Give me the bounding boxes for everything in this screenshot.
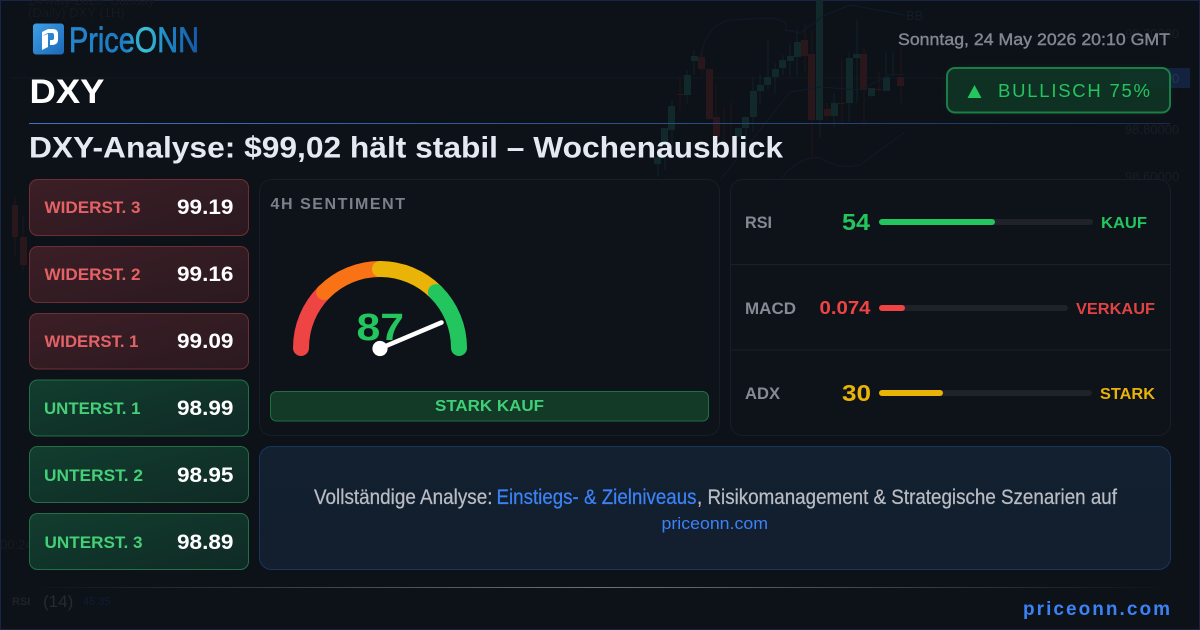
footer brand: priceonn.com bbox=[1023, 599, 1170, 620]
date: Sonntag, 24 May 2026 20:10 GMT bbox=[898, 31, 1170, 49]
MACD row: MACD bbox=[745, 300, 796, 318]
background with faint chart: 45.35 bbox=[83, 596, 111, 608]
resistance 3: WIDERST. 3 bbox=[44, 199, 140, 217]
icon: logo mark bbox=[33, 24, 64, 54]
support 3 bbox=[30, 514, 248, 570]
background with faint chart: 99.01500 bbox=[1125, 71, 1179, 86]
resistance 1: WIDERST. 1 bbox=[44, 333, 138, 351]
ADX row: 30 bbox=[842, 380, 871, 406]
background with faint chart: (Daily) DXY (1H) bbox=[28, 5, 125, 20]
ADX row: ADX bbox=[745, 385, 780, 403]
MACD row: VERKAUF bbox=[1076, 301, 1155, 318]
call to action text: Vollständige Analyse: bbox=[314, 485, 492, 509]
panel: call to action bbox=[260, 446, 1170, 570]
background with faint chart: 99.20000 bbox=[1125, 26, 1179, 41]
background with faint chart: (14) bbox=[43, 592, 73, 611]
background with faint chart: 98.60000 bbox=[1125, 169, 1179, 184]
MACD row: 0.074 bbox=[820, 298, 870, 318]
background with faint chart: BB bbox=[906, 8, 923, 23]
logo: PriceONN bbox=[33, 21, 199, 60]
gauge arc bbox=[301, 269, 459, 348]
RSI row: KAUF bbox=[1101, 215, 1147, 232]
panel: indicators bbox=[730, 180, 1170, 436]
header rule bbox=[29, 123, 1170, 124]
gauge value: 87 bbox=[356, 307, 404, 349]
background with faint chart: 00:24 bbox=[0, 537, 33, 552]
RSI row bbox=[745, 209, 1147, 235]
call to action text bbox=[314, 485, 1117, 509]
badge: bullish: BULLISCH 75% bbox=[998, 80, 1150, 101]
support 3: UNTERST. 3 bbox=[44, 534, 142, 552]
support 2 bbox=[30, 446, 248, 502]
footer rule bbox=[30, 587, 1170, 588]
RSI row: 54 bbox=[842, 209, 870, 235]
support 3: 98.89 bbox=[177, 531, 234, 554]
resistance 3 bbox=[30, 180, 248, 236]
call to action text: , Risikomanagement & Strategische Szenarien auf bbox=[697, 485, 1117, 509]
RSI row: RSI bbox=[745, 214, 772, 232]
panel: 4H sentiment gauge bbox=[260, 180, 720, 436]
resistance 2: 99.16 bbox=[177, 263, 234, 286]
support 2: 98.95 bbox=[177, 464, 234, 487]
background with faint chart: RSI bbox=[12, 596, 30, 608]
background with faint chart: 98.80000 bbox=[1125, 122, 1179, 137]
sentiment verdict: STARK KAUF bbox=[435, 398, 544, 415]
resistance 2 bbox=[30, 246, 248, 302]
ADX row bbox=[745, 380, 1155, 406]
support 2: UNTERST. 2 bbox=[44, 467, 143, 485]
support 1: UNTERST. 1 bbox=[44, 400, 140, 418]
resistance 3: 99.19 bbox=[177, 196, 234, 219]
sentiment verdict bbox=[270, 392, 708, 421]
MACD row bbox=[745, 298, 1155, 318]
resistance 1 bbox=[30, 314, 248, 369]
support 1 bbox=[30, 380, 248, 436]
resistance 1: 99.09 bbox=[177, 330, 234, 353]
call to action link: priceonn.com bbox=[662, 514, 768, 533]
icon: up triangle bbox=[968, 85, 982, 98]
logo: PriceONN: PriceONN bbox=[69, 21, 199, 60]
ADX row: STARK bbox=[1100, 386, 1155, 403]
ticker heading: DXY bbox=[30, 73, 105, 111]
badge: bullish bbox=[947, 68, 1170, 112]
resistance 2: WIDERST. 2 bbox=[44, 266, 140, 284]
gauge needle bbox=[372, 322, 442, 356]
support 1: 98.99 bbox=[177, 397, 234, 420]
panel: price levels bbox=[30, 180, 248, 570]
headline: DXY-Analyse: $99,02 hält stabil – Wochenausblick bbox=[29, 132, 783, 164]
gauge heading: 4H SENTIMENT bbox=[270, 196, 405, 213]
call to action text: Einstiegs- & Zielniveaus bbox=[496, 485, 696, 509]
